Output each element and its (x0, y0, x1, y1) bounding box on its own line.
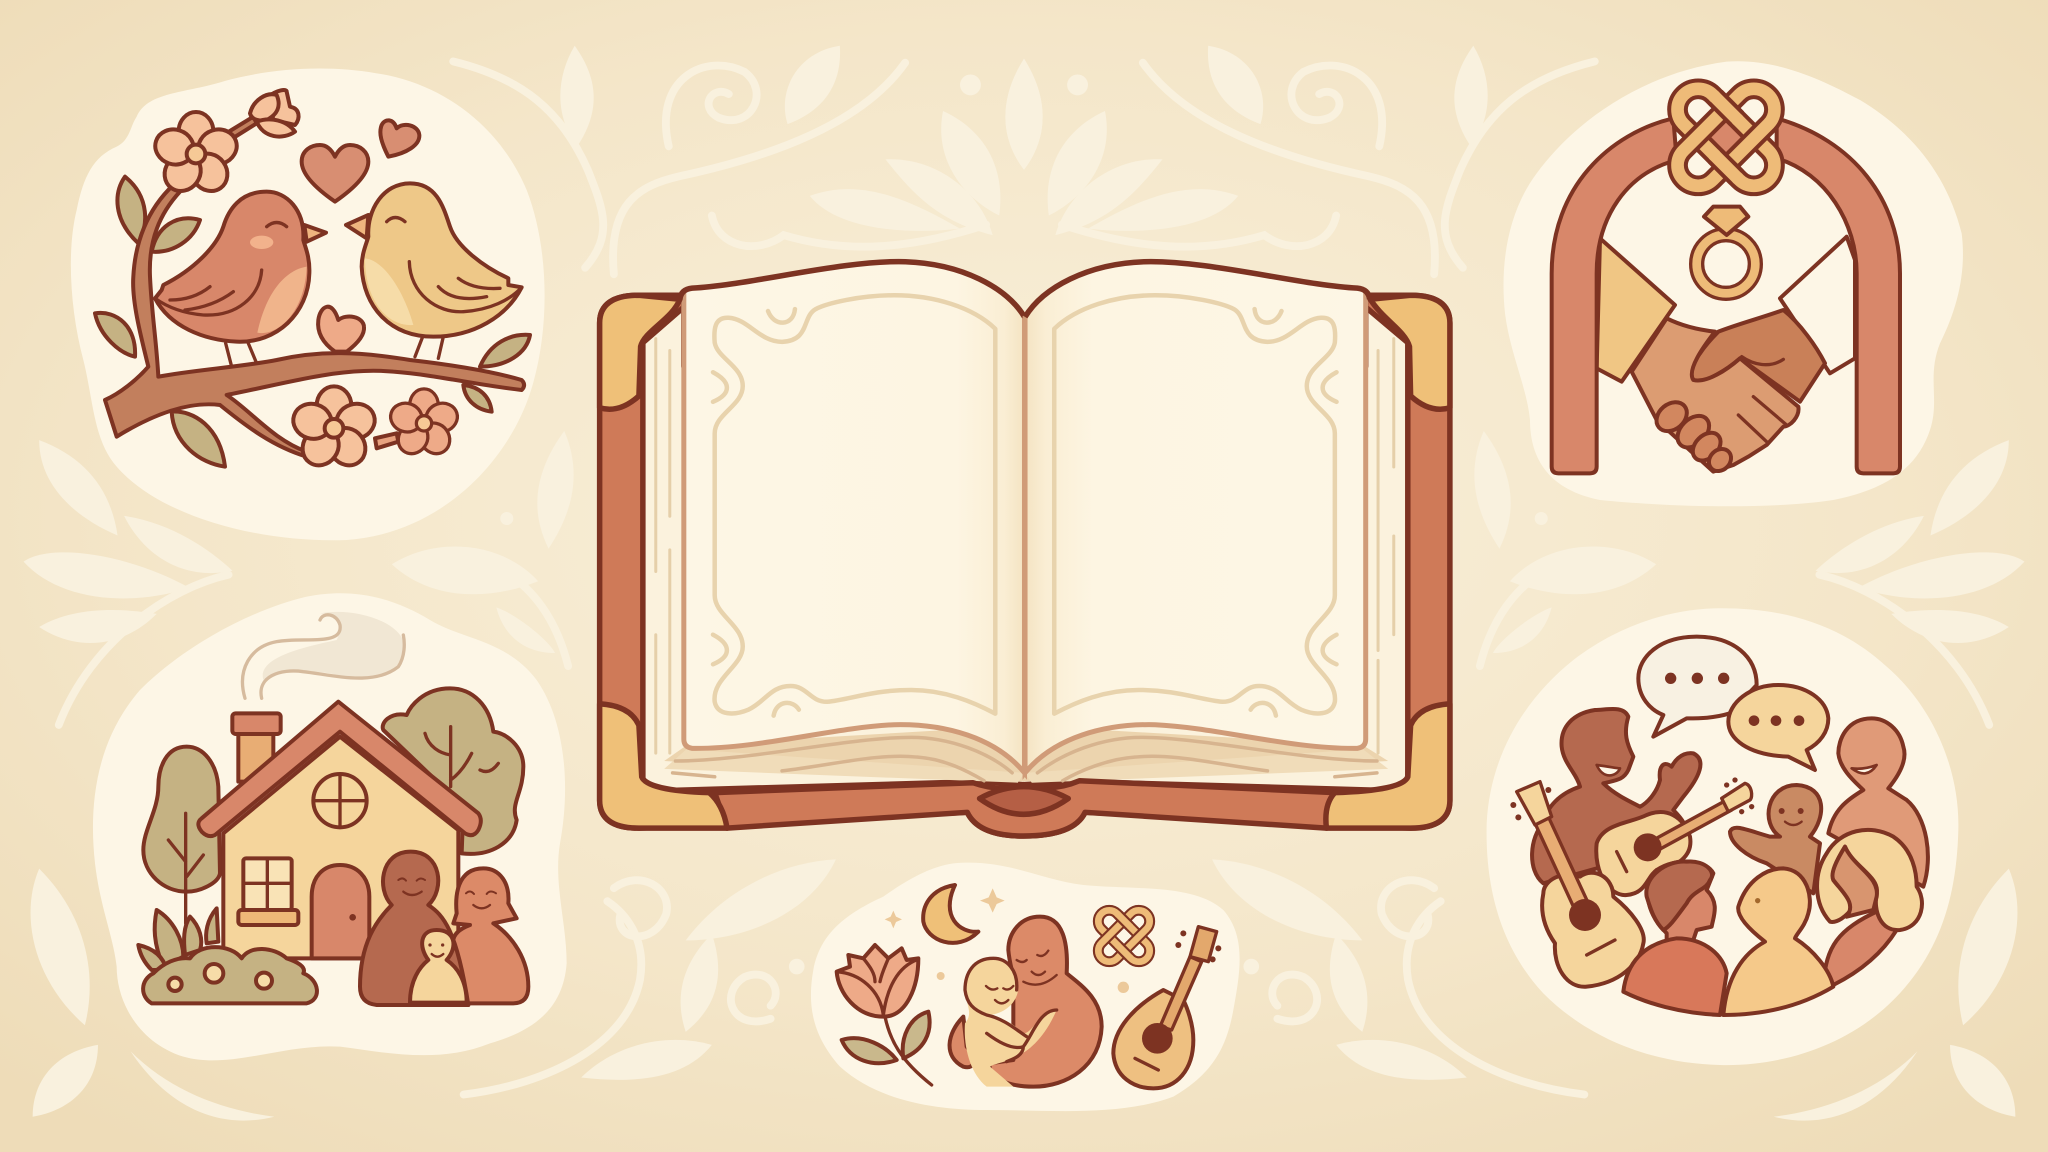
trees (143, 688, 523, 923)
celtic knot (1669, 80, 1783, 194)
woman with long hair (1817, 830, 1922, 985)
house (198, 702, 481, 958)
right page (1025, 262, 1370, 773)
icon: love birds on blossoming branch (95, 90, 530, 472)
icon: rose, moon, embrace, knot and lute (837, 885, 1221, 1088)
singing man (1532, 709, 1700, 883)
speech bubbles (1638, 637, 1828, 770)
moon (923, 885, 978, 943)
bush (138, 908, 317, 1003)
smoke (243, 612, 405, 698)
blob: love birds (71, 69, 545, 540)
handshake (1632, 310, 1825, 476)
person with curly hair (1623, 862, 1727, 1015)
icon: house with family (138, 612, 528, 1005)
blossoms (151, 112, 241, 198)
child (1730, 785, 1821, 893)
blob: motherhood and symbols (811, 863, 1240, 1111)
chimney (232, 713, 281, 782)
family (360, 852, 528, 1005)
hearts (302, 120, 419, 352)
open book (600, 262, 1450, 836)
background ornaments: left floral flourishes (24, 46, 1043, 1121)
icon: arch, knot, ring and handshake (1552, 80, 1900, 476)
stars and dots (885, 888, 1129, 993)
blob: music and community (1487, 608, 1958, 1065)
bud (223, 90, 299, 140)
lute (1113, 927, 1221, 1088)
back cover (600, 295, 1450, 836)
lower page layers (656, 339, 1394, 783)
right person (1828, 718, 1928, 887)
terracotta bird (155, 192, 326, 367)
guitars (1510, 777, 1754, 987)
blob: wedding (1503, 61, 1963, 506)
rose (837, 945, 932, 1085)
knot (1094, 906, 1154, 966)
icon: gathering with guitars and speech bubbles (1510, 637, 1928, 1015)
person in profile (1723, 868, 1833, 1015)
gold corners (600, 295, 1450, 828)
sleeves (1597, 237, 1855, 382)
golden bird (346, 183, 522, 358)
arch (1552, 118, 1900, 473)
page block (643, 307, 1408, 791)
embracing parent and baby (950, 917, 1102, 1087)
blob: home (93, 593, 567, 1060)
left page (680, 262, 1024, 773)
branch (105, 185, 524, 457)
ring (1697, 207, 1755, 293)
bottom cover strip and spine (715, 781, 1335, 836)
leaves (95, 177, 530, 467)
background ornaments: right floral flourishes (1005, 46, 2024, 1121)
